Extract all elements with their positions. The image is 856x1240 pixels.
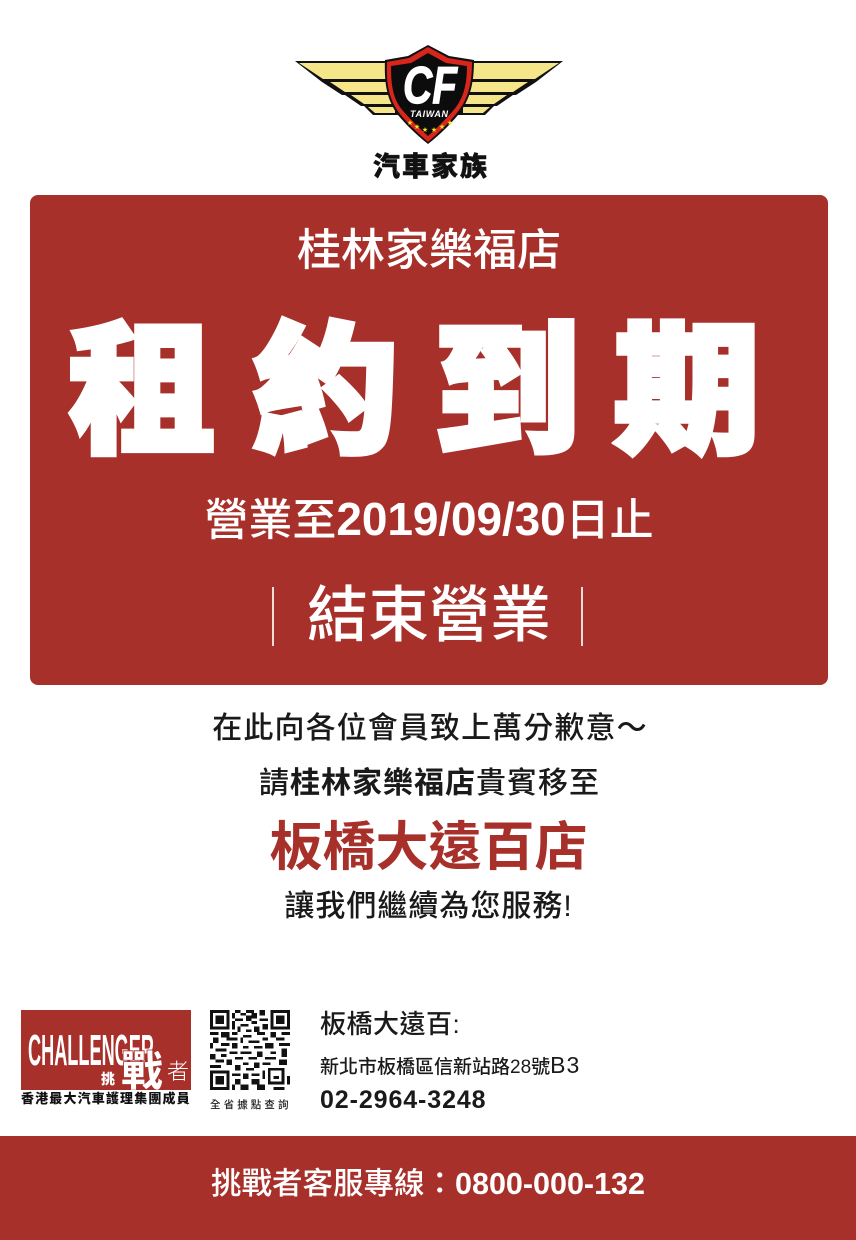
QR code (210, 1010, 290, 1090)
address: 新北市板橋區信新站路28號B3 (320, 1052, 580, 1078)
store name: 桂林家樂福店 (297, 226, 561, 275)
main heading (68, 313, 760, 472)
main heading: 到 (434, 313, 580, 472)
logo tagline: 香港最大汽車護理集團成員 (21, 1091, 191, 1106)
phone number: 02-2964-3248 (320, 1086, 486, 1114)
relocation message: 請桂林家樂福店貴賓移至 (259, 767, 600, 800)
QR caption: 全省據點查詢 (210, 1099, 292, 1111)
main heading: 期 (614, 313, 760, 472)
stars: ★ (407, 119, 413, 127)
stars: ★ (439, 123, 445, 131)
store label: 板橋大遠百: (320, 1009, 460, 1039)
logo red block: 挑 (101, 1069, 115, 1089)
icon: shield: TAIWAN (410, 109, 448, 119)
logo wordmark: 汽車家族 (373, 145, 487, 184)
logo letters: CF (403, 57, 458, 115)
stars: ★ (422, 126, 428, 134)
left bracket line (272, 587, 274, 646)
icon: right wing (458, 61, 563, 115)
main heading: 租 (69, 313, 215, 472)
main heading: 約 (252, 313, 398, 472)
closing date: 營業至2019/09/30日止 (204, 493, 654, 545)
footer band (0, 1136, 856, 1240)
logo red block: 者 (167, 1054, 189, 1086)
apology message: 在此向各位會員致上萬分歉意～ (212, 712, 648, 745)
closure label: 結束營業 (307, 581, 551, 649)
right bracket line (581, 587, 582, 646)
stars: ★ (431, 126, 437, 134)
stars (407, 119, 453, 134)
logo: Challenger (21, 1010, 191, 1106)
icon: shield (385, 45, 474, 144)
service message: 讓我們繼續為您服務! (284, 890, 573, 923)
customer service hotline: 挑戰者客服專線：0800-000-132 (211, 1167, 645, 1201)
stars: ★ (447, 119, 453, 127)
icon: left wing (295, 61, 400, 115)
logo: CF Taiwan winged shield (295, 45, 563, 184)
logo red block (21, 1010, 191, 1090)
panel: red closure notice (30, 195, 828, 685)
new store name: 板橋大遠百店 (270, 818, 588, 877)
store address block (320, 1009, 580, 1114)
stars: ★ (414, 123, 420, 131)
